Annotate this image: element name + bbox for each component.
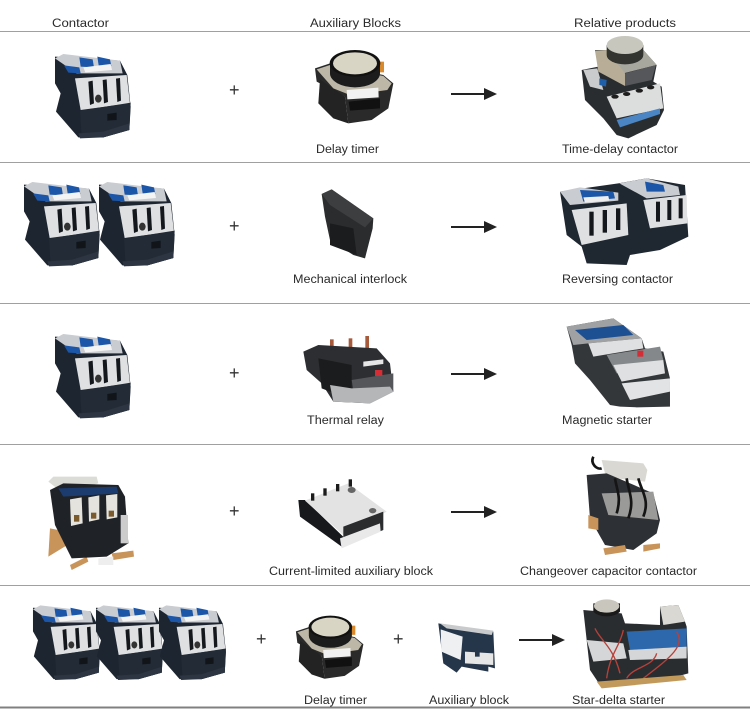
plus sign: + [229,363,240,383]
icon: delay timer [296,616,363,679]
label: changeover capacitor contactor: Changeover capacitor contactor [520,566,697,578]
arrow [519,634,565,646]
icon: current-limited auxiliary block [298,479,387,548]
icon: magnetic starter [567,318,670,407]
arrow [451,221,497,233]
arrow [451,368,497,380]
icon: star-delta starter [583,599,688,688]
icon: contactor [55,54,131,138]
icon: changeover capacitor contactor [587,457,660,555]
label: star-delta starter: Star-delta starter [572,695,665,707]
plus sign: + [393,629,404,649]
row 1: time-delay contactor [55,36,678,156]
heading: Relative products: Relative products [574,18,676,30]
label: thermal relay: Thermal relay [307,415,384,427]
icon: contactor 3 [159,605,226,680]
plus sign: + [229,216,240,236]
label: delay timer: Delay timer [304,695,367,707]
icon: mechanical interlock [322,189,373,258]
icon: reversing contactor [560,178,688,265]
column headings [52,18,676,30]
icon: auxiliary block [438,623,495,673]
heading: Auxiliary Blocks: Auxiliary Blocks [310,18,401,30]
plus sign: + [256,629,267,649]
arrow [451,506,497,518]
arrow [451,88,497,100]
label: auxiliary block: Auxiliary block [429,695,509,707]
label: current-limited auxiliary block: Current-limited auxiliary block [269,566,433,578]
plus sign: + [229,501,240,521]
icon: thermal relay [303,336,393,403]
icon: contactor 1 [33,605,100,680]
plus sign: + [229,80,240,100]
label: magnetic starter: Magnetic starter [562,415,652,427]
icon: contactor 2 [96,605,163,680]
icon: large contactor [48,477,134,570]
label: time-delay contactor: Time-delay contactor [562,144,678,156]
icon: contactor [55,334,131,418]
label: mechanical interlock: Mechanical interlock [293,274,407,286]
icon: contactor right [99,182,175,266]
row 2: reversing contactor [24,178,688,286]
icon: time-delay contactor [582,36,664,138]
row 3: magnetic starter [55,318,670,427]
row 4: changeover capacitor contactor [48,457,697,578]
label: reversing contactor: Reversing contactor [562,274,673,286]
icon: delay timer [315,50,393,123]
row 5: star-delta starter [33,599,688,707]
label: delay timer: Delay timer [316,144,379,156]
icon: contactor left [24,182,100,266]
heading: Contactor: Contactor [52,18,109,30]
